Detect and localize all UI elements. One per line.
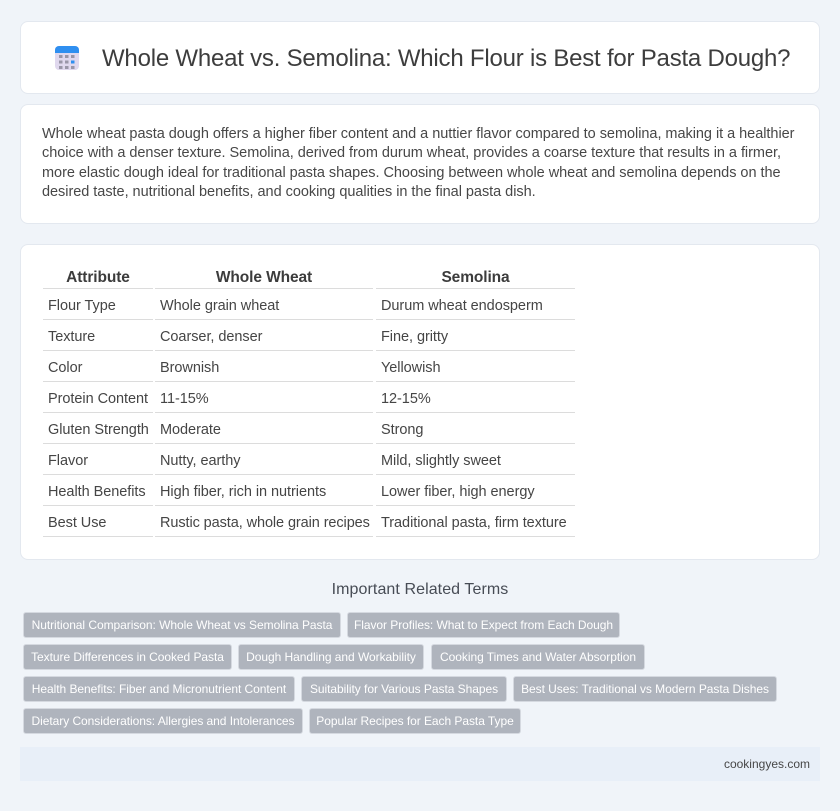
row: color — [48, 360, 440, 376]
table header: Semolina — [441, 269, 510, 286]
row: health benefits — [48, 484, 535, 500]
row: flour type: Flour Type — [48, 298, 116, 314]
text block: introduction: desired taste, nutritional benefits, and cooking qualities in the final pasta dish. — [42, 184, 536, 200]
table header: Attribute — [66, 269, 130, 286]
row: flour type: Durum wheat endosperm — [381, 298, 543, 314]
footer text: source: cookingyes.com — [724, 757, 810, 771]
panel: introduction — [20, 104, 820, 224]
chip: Suitability for Various Pasta Shapes — [310, 682, 498, 696]
chip — [238, 644, 424, 670]
chip — [301, 676, 507, 702]
row: flour type: Whole grain wheat — [160, 298, 279, 314]
row: color: Yellowish — [381, 360, 440, 376]
chip: Best Uses: Traditional vs Modern Pasta Dishes — [521, 682, 769, 696]
row: texture — [48, 329, 448, 345]
chip — [431, 644, 645, 670]
chip — [513, 676, 777, 702]
panel: comparison table — [20, 244, 820, 560]
chip: Cooking Times and Water Absorption — [440, 650, 636, 664]
row: protein content: Protein Content — [48, 391, 148, 407]
row: flavor: Flavor — [48, 453, 88, 469]
row: best use: Best Use — [48, 515, 106, 531]
icon: calendar — [55, 46, 79, 70]
text block: introduction: more elastic dough ideal for traditional pasta shapes. Choosing between whole wheat and semolina depends on the — [42, 165, 781, 181]
row: gluten strength — [48, 422, 423, 438]
chip: Popular Recipes for Each Pasta Type — [316, 714, 514, 728]
row: flavor: Nutty, earthy — [160, 453, 240, 469]
row: health benefits: Lower fiber, high energy — [381, 484, 535, 500]
chip — [23, 708, 303, 734]
chip — [23, 676, 295, 702]
text block: introduction: choice with a denser texture. Semolina, derived from durum wheat, provides a coarse texture that results in a firmer, — [42, 145, 781, 161]
row: protein content: 12-15% — [381, 391, 431, 407]
row: protein content — [48, 391, 431, 407]
chip: Health Benefits: Fiber and Micronutrient Content — [32, 682, 286, 696]
row: texture: Texture — [48, 329, 95, 345]
chip: Dough Handling and Workability — [246, 650, 416, 664]
related term chips — [23, 612, 777, 734]
row: flour type — [48, 298, 543, 314]
row: gluten strength: Moderate — [160, 422, 221, 438]
chip — [23, 644, 232, 670]
table header — [66, 269, 510, 286]
row: health benefits: Health Benefits — [48, 484, 146, 500]
row: gluten strength: Gluten Strength — [48, 422, 149, 438]
header card — [20, 21, 820, 94]
row: color: Brownish — [160, 360, 219, 376]
chip — [23, 612, 341, 638]
row: protein content: 11-15% — [160, 391, 209, 407]
table header: Whole Wheat — [216, 269, 312, 286]
row: health benefits: High fiber, rich in nutrients — [160, 484, 326, 500]
text block: introduction: Whole wheat pasta dough offers a higher fiber content and a nuttier flavor compared to semolina, making it a healthier — [42, 126, 794, 142]
row: gluten strength: Strong — [381, 422, 423, 438]
footer — [20, 747, 820, 781]
row: flavor — [48, 453, 501, 469]
row: best use: Rustic pasta, whole grain recipes — [160, 515, 370, 531]
chip — [309, 708, 521, 734]
row: texture: Coarser, denser — [160, 329, 262, 345]
chip: Texture Differences in Cooked Pasta — [31, 650, 224, 664]
row: best use — [48, 515, 567, 531]
text block: introduction — [42, 126, 794, 200]
chip: Nutritional Comparison: Whole Wheat vs Semolina Pasta — [32, 618, 332, 632]
chip — [347, 612, 620, 638]
title: Whole Wheat vs. Semolina: Which Flour is Best for Pasta Dough? — [102, 45, 790, 72]
chip: Dietary Considerations: Allergies and Intolerances — [32, 714, 294, 728]
row: texture: Fine, gritty — [381, 329, 448, 345]
heading: important related terms: Important Related Terms — [332, 581, 508, 598]
row: best use: Traditional pasta, firm texture — [381, 515, 567, 531]
row: color: Color — [48, 360, 82, 376]
chip: Flavor Profiles: What to Expect from Each Dough — [354, 618, 613, 632]
row: flavor: Mild, slightly sweet — [381, 453, 501, 469]
